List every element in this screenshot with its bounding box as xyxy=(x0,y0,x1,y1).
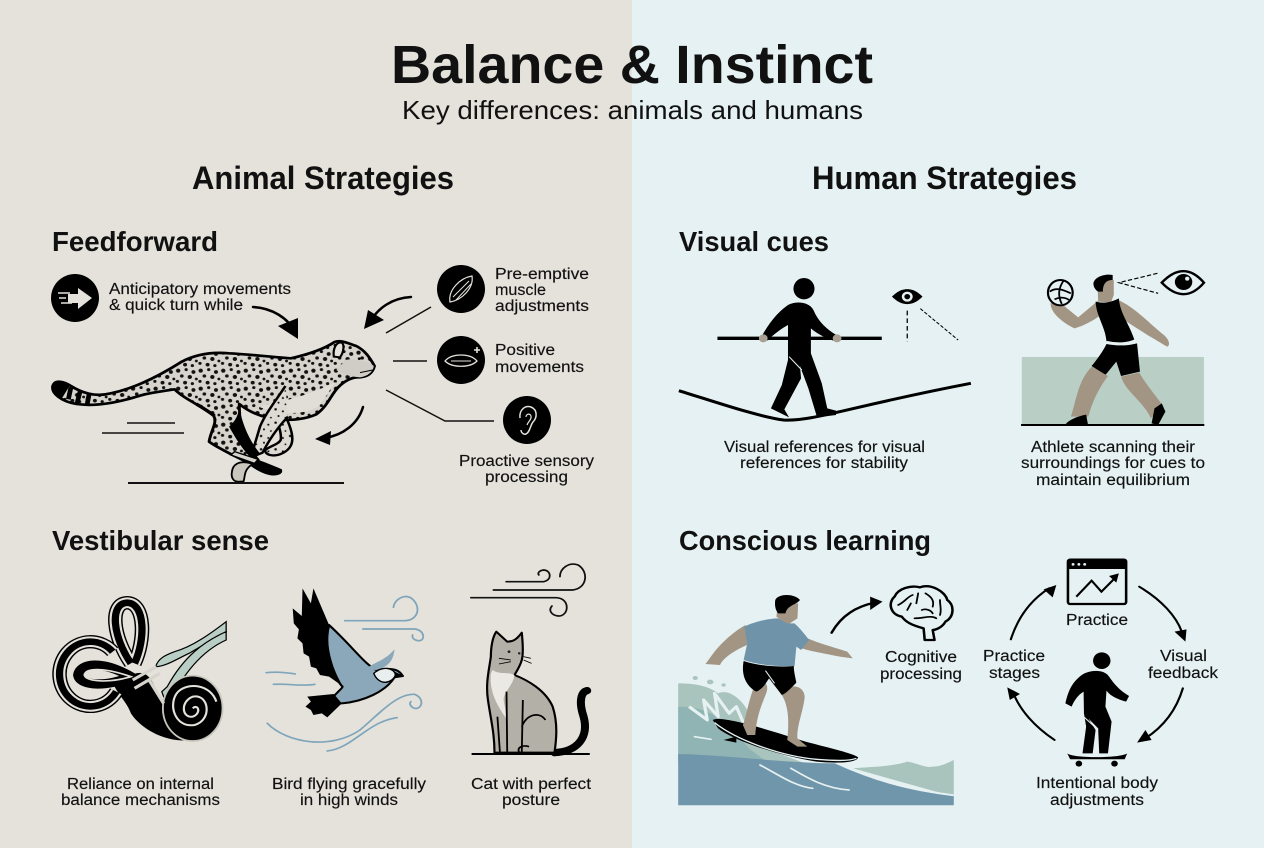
panel: feedforward illustration xyxy=(51,265,594,486)
icon: practice chart window xyxy=(1068,560,1126,604)
text: bird flying: in high winds xyxy=(300,792,398,809)
panel: vestibular illustrations xyxy=(60,564,592,809)
text: visual references: Visual references for visual xyxy=(724,439,925,456)
heading: vestibular sense: Vestibular sense xyxy=(52,525,269,556)
text: positive movements: Positive xyxy=(495,342,555,359)
text: cat posture: posture xyxy=(502,792,560,809)
title: Balance & Instinct xyxy=(391,35,873,95)
cheetah xyxy=(53,341,375,482)
text: intentional body adjustments: Intentional body xyxy=(1036,775,1158,792)
icon: positive xyxy=(437,336,485,384)
arrow to cheetah legs xyxy=(315,407,363,445)
text: athlete caption: maintain equilibrium xyxy=(1036,472,1190,489)
cycle diagram xyxy=(1007,560,1186,767)
text: proactive sensory processing: Proactive sensory xyxy=(459,453,594,470)
text: cat posture: Cat with perfect xyxy=(471,776,592,793)
heading: conscious learning: Conscious learning xyxy=(679,525,931,556)
text: proactive sensory processing xyxy=(459,453,594,486)
icon: brain xyxy=(891,586,952,640)
text: anticipatory movements xyxy=(109,281,291,314)
text: internal balance mechanisms xyxy=(61,776,220,809)
surfer on wave xyxy=(678,595,954,805)
text: intentional body adjustments xyxy=(1036,775,1158,809)
icon: eye with sight lines xyxy=(892,289,958,342)
text: muscle adjustments: adjustments xyxy=(495,298,589,315)
heading: human strategies: Human Strategies xyxy=(812,160,1077,196)
panel: visual cues illustrations xyxy=(679,271,1205,489)
panel: animal strategies background xyxy=(0,0,632,848)
figure on skateboard xyxy=(1065,652,1129,767)
text: cognitive processing: Cognitive xyxy=(885,649,957,666)
text: positive movements: movements xyxy=(495,359,584,376)
cat with wind xyxy=(471,564,590,754)
text: practice: Practice xyxy=(1066,612,1128,629)
text: athlete caption: Athlete scanning their xyxy=(1031,439,1195,456)
text: visual references xyxy=(724,439,925,472)
text: cat posture xyxy=(471,776,592,809)
text: positive movements xyxy=(495,342,584,376)
panel: conscious learning illustrations xyxy=(678,560,1218,809)
text: athlete caption xyxy=(1021,439,1205,489)
heading: feedforward: Feedforward xyxy=(52,226,218,257)
text: bird flying xyxy=(272,776,426,809)
text: anticipatory movements: Anticipatory movements xyxy=(109,281,291,298)
text: intentional body adjustments: adjustments xyxy=(1050,792,1144,809)
text: proactive sensory processing: processing xyxy=(485,469,568,486)
bird in wind xyxy=(266,588,423,751)
heading: animal strategies: Animal Strategies xyxy=(192,160,454,196)
icon: anticipatory arrow xyxy=(51,274,99,322)
arrows: cycle xyxy=(1007,585,1186,743)
icon: muscle xyxy=(437,265,485,313)
text: practice stages: stages xyxy=(989,665,1040,682)
arrow to cheetah head xyxy=(364,297,411,329)
tightrope walker xyxy=(679,278,971,420)
text: internal balance mechanisms: Reliance on internal xyxy=(67,776,214,793)
text: visual feedback: feedback xyxy=(1148,665,1218,682)
text: muscle adjustments: Pre-emptive xyxy=(495,266,589,283)
text: cognitive processing: processing xyxy=(880,666,962,683)
subtitle: Key differences: animals and humans xyxy=(402,95,863,125)
text: practice stages: Practice xyxy=(983,648,1045,665)
panel: human strategies background xyxy=(632,0,1264,848)
inner ear xyxy=(60,603,226,741)
arrow to cheetah back xyxy=(253,307,298,339)
athlete scanning xyxy=(1021,271,1204,425)
ground and speed lines xyxy=(102,423,344,483)
icon: ear xyxy=(503,396,551,444)
leader lines xyxy=(386,307,494,421)
text: athlete caption: surroundings for cues to xyxy=(1021,455,1205,472)
text: practice stages xyxy=(983,648,1045,682)
text: muscle adjustments: muscle xyxy=(495,282,546,299)
text: bird flying: Bird flying gracefully xyxy=(272,776,426,793)
heading: visual cues: Visual cues xyxy=(679,226,829,257)
text: muscle adjustments xyxy=(495,266,589,315)
text: cognitive processing xyxy=(880,649,962,683)
text: visual feedback xyxy=(1148,648,1218,682)
text: visual references: references for stability xyxy=(740,455,908,472)
text: anticipatory movements: & quick turn while xyxy=(109,297,243,314)
text: visual feedback: Visual xyxy=(1160,648,1207,665)
text: internal balance mechanisms: balance mechanisms xyxy=(61,792,220,809)
